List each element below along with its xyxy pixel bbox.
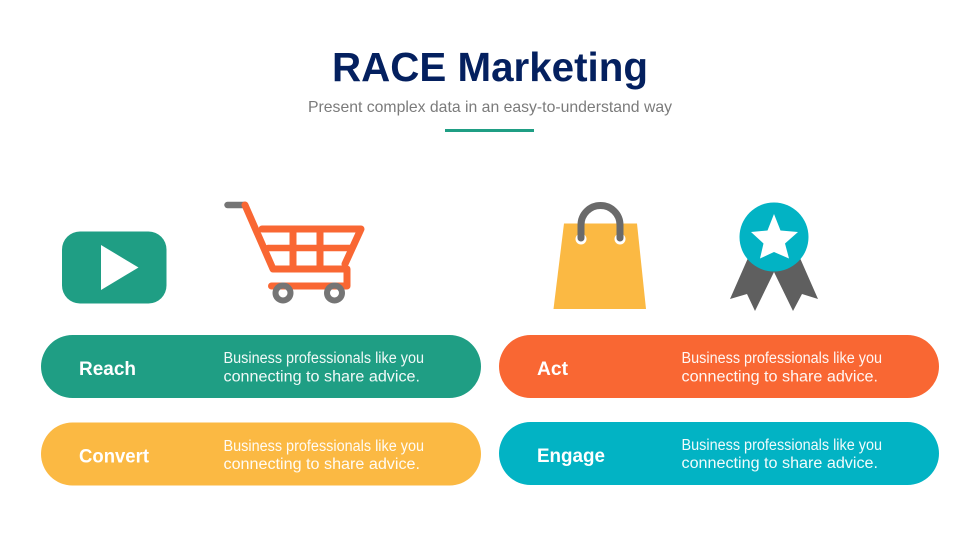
panel: engage <box>499 422 939 485</box>
icon: play button <box>62 232 166 304</box>
panel: convert <box>41 422 481 486</box>
panel: reach <box>41 335 481 398</box>
convert description: connecting to share advice. <box>224 456 420 473</box>
convert label: Convert <box>79 446 150 468</box>
subtitle: Present complex data in an easy-to-understand way <box>308 99 672 116</box>
reach description: Business professionals like you <box>224 350 424 367</box>
convert description: Business professionals like you <box>224 438 424 455</box>
act description: Business professionals like you <box>682 350 882 367</box>
act description: connecting to share advice. <box>682 368 878 386</box>
title: RACE Marketing <box>332 44 648 90</box>
title underline <box>445 129 534 132</box>
engage description: Business professionals like you <box>682 437 882 454</box>
engage label: Engage <box>537 446 605 467</box>
icon: shopping cart <box>228 205 361 300</box>
reach description <box>224 350 424 386</box>
engage description <box>682 437 882 472</box>
reach description: connecting to share advice. <box>224 368 420 386</box>
act label: Act <box>537 359 569 380</box>
reach label: Reach <box>79 359 136 380</box>
convert description <box>224 438 424 473</box>
icon: award ribbon <box>730 202 818 311</box>
panel: act <box>499 335 939 398</box>
act description <box>682 350 882 386</box>
icon: shopping bag <box>554 206 646 309</box>
engage description: connecting to share advice. <box>682 455 878 472</box>
